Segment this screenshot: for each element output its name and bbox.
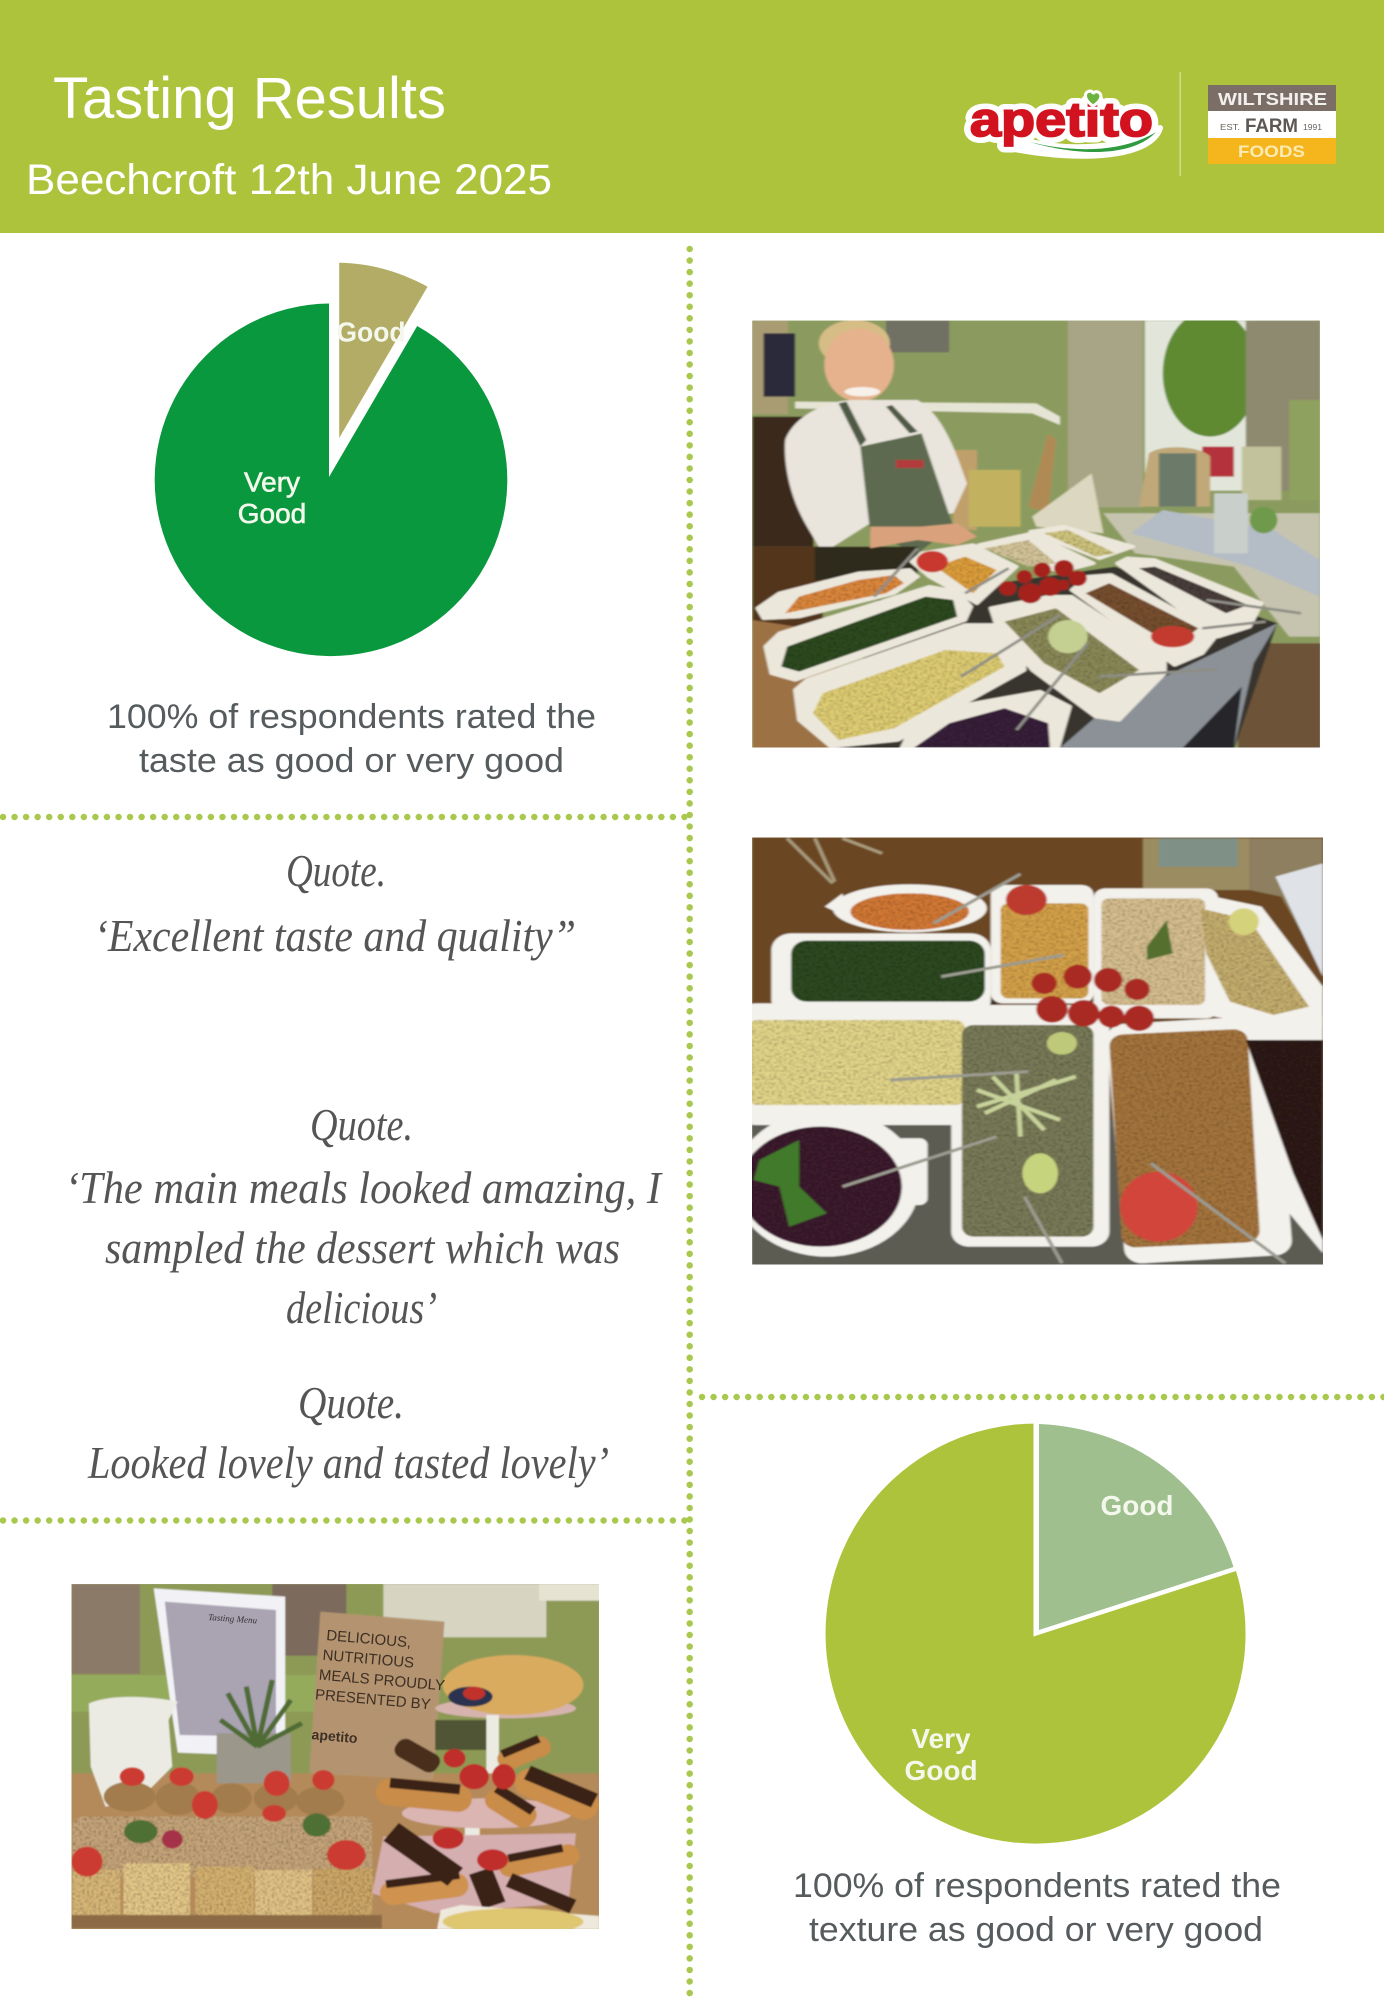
quote 1: ‘Excellent taste and quality” xyxy=(94,910,576,961)
paper sign text: MEALS PROUDLY xyxy=(318,1667,446,1695)
slice: good xyxy=(1039,1424,1234,1630)
caption: taste xyxy=(107,698,596,780)
logo: Wiltshire Farm Foods: FOODS xyxy=(1238,142,1305,161)
paper sign text: NUTRITIOUS xyxy=(322,1647,415,1672)
label: good: Good xyxy=(336,317,406,348)
paper sign text xyxy=(312,1630,445,1743)
quote 3 xyxy=(87,1377,609,1488)
logo: Wiltshire Farm Foods: FARM xyxy=(1245,116,1298,137)
quote 2: sampled the dessert which was xyxy=(105,1222,620,1273)
photo: overhead buffet dishes xyxy=(734,837,1325,1267)
quote 3: Quote. xyxy=(298,1377,404,1428)
paper sign text: DELICIOUS, xyxy=(326,1627,412,1651)
logo: Wiltshire Farm Foods: WILTSHIRE xyxy=(1218,89,1327,109)
pie chart: texture xyxy=(826,1424,1246,1844)
subtitle: Beechcroft 12th June 2025 xyxy=(26,156,552,204)
quote 2: Quote. xyxy=(310,1099,413,1150)
caption: texture xyxy=(793,1867,1281,1949)
logo: Wiltshire Farm Foods: 1991 xyxy=(1303,122,1322,132)
label: very good: Good xyxy=(904,1755,978,1786)
label: very good xyxy=(238,466,306,529)
caption: taste: taste as good or very good xyxy=(139,742,564,780)
menu card text: Tasting Menu xyxy=(208,1612,258,1625)
quote 2: ‘The main meals looked amazing, I xyxy=(65,1162,663,1213)
quote 2: delicious’ xyxy=(286,1282,437,1333)
header band xyxy=(0,0,1384,233)
logo: apetito xyxy=(970,91,1160,156)
label: good: Good xyxy=(1100,1490,1174,1521)
label: very good: Good xyxy=(238,498,306,529)
pie chart: taste xyxy=(155,263,507,656)
photo: desserts display xyxy=(70,1583,605,1935)
logo: apetito: apetito xyxy=(970,94,1153,147)
logo: Wiltshire Farm Foods xyxy=(1208,85,1336,164)
slice: good xyxy=(339,263,428,438)
caption: texture: texture as good or very good xyxy=(809,1911,1263,1949)
label: very good: Very xyxy=(244,466,300,498)
paper sign text: apetito xyxy=(311,1726,358,1746)
photo: chef with buffet dishes xyxy=(752,310,1321,750)
caption: texture: 100% of respondents rated the xyxy=(793,1867,1281,1905)
logo divider xyxy=(1180,72,1181,176)
logo: Wiltshire Farm Foods: EST. xyxy=(1220,122,1240,132)
logo: apetito: apetito xyxy=(970,94,1153,147)
quote 1 xyxy=(94,845,576,961)
title: Tasting Results xyxy=(53,66,446,131)
label: very good xyxy=(904,1723,978,1786)
quote 1: Quote. xyxy=(286,845,386,896)
caption: taste: 100% of respondents rated the xyxy=(107,698,596,736)
quote 3: Looked lovely and tasted lovely’ xyxy=(87,1437,609,1488)
paper sign text: PRESENTED BY xyxy=(314,1686,431,1713)
quote 2 xyxy=(65,1099,663,1333)
label: very good: Very xyxy=(911,1723,971,1754)
